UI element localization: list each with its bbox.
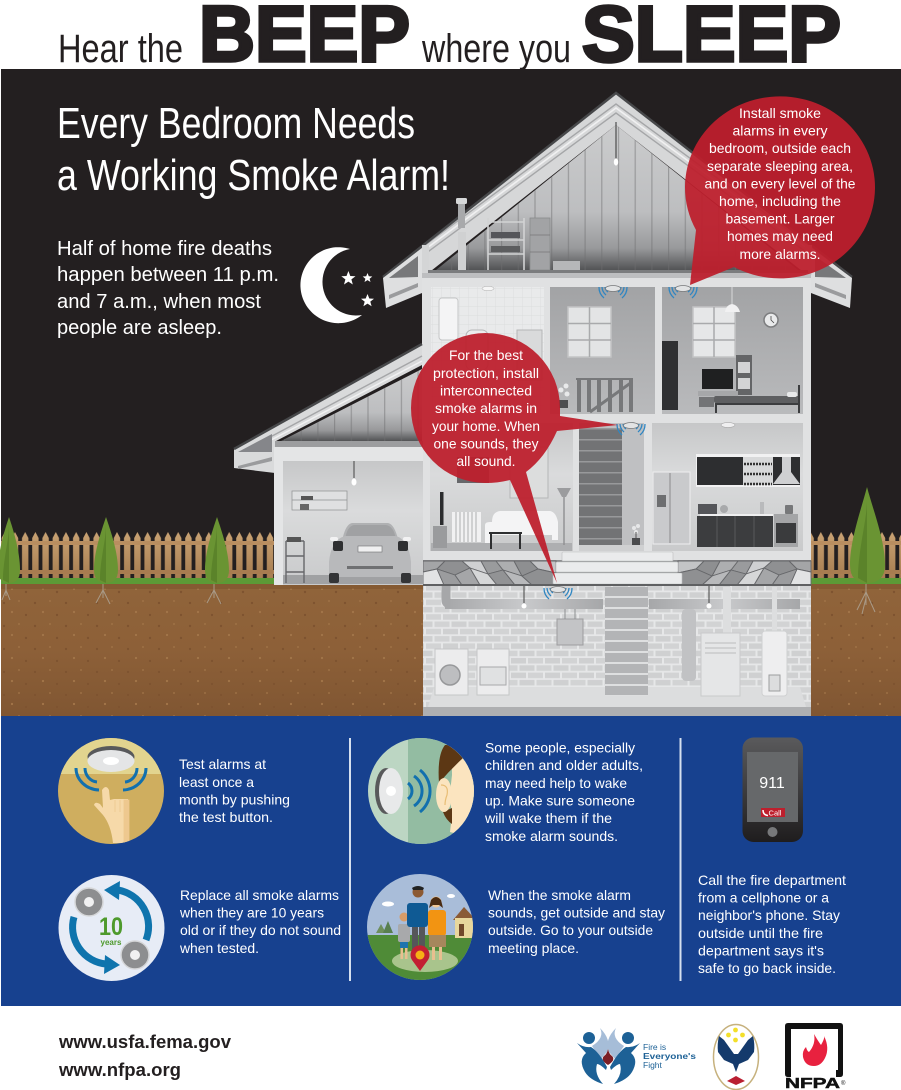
water heater bbox=[772, 587, 777, 631]
tip text: call fire department bbox=[698, 872, 846, 976]
10 years label: 10 bbox=[99, 913, 123, 941]
basement bbox=[423, 586, 811, 716]
fence: left bbox=[1, 532, 275, 582]
blue tips panel bbox=[1, 716, 901, 1006]
callout: interconnected alarms: For the best bbox=[449, 347, 523, 363]
father bbox=[412, 890, 424, 898]
headline: where you bbox=[421, 27, 571, 71]
callout: interconnected alarms bbox=[411, 333, 618, 583]
stove bbox=[774, 514, 798, 547]
callout: install alarms: and on every level of the bbox=[704, 176, 856, 192]
attic bulb bbox=[615, 122, 617, 160]
alarms bbox=[75, 888, 103, 916]
tip text: get outside: outside. Go to your outside bbox=[488, 922, 653, 938]
sound waves bbox=[408, 770, 430, 812]
logo: NFPA: ® bbox=[841, 1080, 846, 1087]
logo: Fire is Everyone's Fight: Fire is bbox=[643, 1042, 666, 1052]
callout: interconnected alarms: smoke alarms in bbox=[435, 400, 537, 416]
headline bbox=[58, 0, 841, 78]
intro statement: and 7 a.m., when most bbox=[57, 291, 261, 313]
logo: Fire is Everyone's Fight: Fight bbox=[643, 1060, 663, 1070]
washer bbox=[435, 649, 468, 695]
tip text: help others wake: may need help to wake bbox=[485, 775, 627, 791]
garage walls and interior bbox=[274, 447, 423, 585]
callout: install alarms: separate sleeping area, bbox=[707, 158, 853, 174]
hanging bulbs bbox=[524, 586, 709, 603]
front steps bbox=[553, 552, 682, 584]
icon: cellphone dialing 911 bbox=[742, 738, 803, 842]
room: living room bbox=[430, 423, 573, 551]
alarm bbox=[88, 746, 134, 759]
logo: Fire is Everyone's Fight bbox=[577, 1028, 696, 1084]
attic boxes bbox=[530, 218, 550, 270]
tip text: help others wake: up. Make sure someone bbox=[485, 792, 635, 808]
upper cabinets bbox=[696, 454, 800, 487]
callout: install alarms: Install smoke bbox=[739, 105, 821, 121]
night sky panel bbox=[1, 69, 901, 585]
footer web addresses: www.usfa.fema.gov bbox=[58, 1032, 231, 1052]
intro statement: people are asleep. bbox=[57, 317, 222, 339]
clouds bbox=[382, 902, 394, 906]
room: bedroom bbox=[662, 286, 803, 414]
tip text: call fire department: department says it's bbox=[698, 942, 824, 958]
tip text: test alarms: Test alarms at bbox=[179, 756, 266, 772]
room: upstairs hall bbox=[550, 286, 655, 414]
main title: a Working Smoke Alarm! bbox=[57, 151, 450, 200]
house walls bbox=[422, 278, 811, 560]
tip text: replace alarms: Replace all smoke alarms bbox=[180, 887, 339, 903]
lower cabinets bbox=[697, 516, 773, 547]
tip text: get outside bbox=[488, 887, 665, 956]
logo: Fire is Everyone's Fight: Everyone's bbox=[643, 1051, 696, 1061]
trees bbox=[0, 487, 885, 583]
footer web addresses bbox=[58, 1032, 231, 1080]
callout: interconnected alarms: interconnected bbox=[440, 382, 532, 398]
furnace bbox=[723, 587, 731, 633]
left eave bbox=[383, 248, 422, 308]
callout: interconnected alarms: your home. When bbox=[432, 418, 540, 434]
tip text: call fire department: from a cellphone or a bbox=[698, 890, 829, 906]
callout: interconnected alarms: protection, install bbox=[433, 365, 539, 381]
tip text: get outside: sounds, get outside and stay bbox=[488, 904, 665, 920]
tip text: test alarms bbox=[179, 756, 290, 825]
fence: right bbox=[811, 532, 901, 582]
room: bathroom bbox=[431, 286, 544, 414]
icon: family at meeting place bbox=[367, 874, 476, 980]
callout: install alarms: bedroom, outside each bbox=[709, 140, 851, 156]
callout: install alarms: home, including the bbox=[719, 193, 841, 209]
tree roots bbox=[2, 584, 875, 614]
dryer bbox=[477, 649, 509, 695]
tip text: help others wake: will wake them if the bbox=[484, 810, 612, 826]
icon: cellphone dialing 911: Call bbox=[769, 808, 782, 818]
logo: NFPA bbox=[785, 1023, 846, 1090]
icon: replace every 10 years: years bbox=[101, 938, 122, 947]
hand bbox=[94, 787, 129, 843]
blue cycle arrows bbox=[118, 890, 149, 940]
column divider bbox=[349, 738, 351, 981]
attic floor bbox=[422, 270, 811, 279]
callout: install alarms bbox=[685, 96, 875, 285]
tip text: replace alarms: old or if they do not sound bbox=[180, 922, 341, 938]
stone foundation bbox=[423, 560, 811, 585]
garage gable bbox=[281, 369, 422, 441]
icon: alarm beside ear bbox=[368, 738, 480, 844]
tip text: replace alarms: when tested. bbox=[179, 940, 259, 956]
tip text: get outside: meeting place. bbox=[488, 940, 579, 956]
soil ground bbox=[1, 584, 901, 716]
intro statement: happen between 11 p.m. bbox=[57, 264, 279, 286]
callout: install alarms: alarms in every bbox=[732, 122, 828, 138]
icon: pressing test button bbox=[58, 738, 164, 844]
tip text: help others wake bbox=[484, 740, 643, 844]
attic shelves bbox=[488, 218, 524, 272]
callout: install alarms: homes may need bbox=[727, 228, 833, 244]
icon: replace every 10 years bbox=[58, 875, 164, 981]
counter appliances bbox=[698, 504, 717, 514]
main title: Every Bedroom Needs bbox=[57, 99, 415, 148]
fridge bbox=[653, 472, 690, 544]
callout: install alarms: more alarms. bbox=[740, 246, 820, 262]
garage roof bbox=[234, 344, 422, 473]
house bbox=[453, 907, 472, 920]
sound waves bbox=[76, 768, 146, 790]
garage bbox=[234, 344, 423, 585]
electrical panel bbox=[557, 619, 583, 645]
tip text: replace alarms: when they are 10 years bbox=[179, 904, 324, 920]
map pin bbox=[410, 945, 430, 971]
tip text: call fire department: Call the fire department bbox=[698, 872, 846, 888]
headline: Hear the bbox=[58, 27, 183, 71]
basement stairs bbox=[605, 587, 648, 696]
callout: install alarms: basement. Larger bbox=[726, 210, 835, 226]
icon: cellphone dialing 911: 911 bbox=[759, 775, 785, 792]
tip text: call fire department: outside until the fire bbox=[698, 925, 823, 941]
floor lamp bbox=[563, 497, 565, 545]
garage bulb bbox=[353, 461, 355, 478]
intro statement: Half of home fire deaths bbox=[57, 238, 272, 260]
range hood bbox=[773, 457, 800, 484]
column divider bbox=[680, 738, 682, 981]
radiator bbox=[452, 512, 481, 542]
tip text: help others wake: Some people, especially bbox=[485, 740, 635, 756]
garage shelves bbox=[292, 491, 347, 510]
callout: interconnected alarms: all sound. bbox=[456, 453, 516, 469]
mother bbox=[430, 896, 442, 908]
child bbox=[400, 912, 407, 922]
vent pipe bbox=[456, 198, 467, 204]
room: stairwell bbox=[579, 422, 645, 551]
tip text: help others wake: smoke alarm sounds. bbox=[485, 828, 618, 844]
ducts bbox=[445, 599, 603, 609]
TV and stand bbox=[702, 369, 733, 389]
tip text: replace alarms bbox=[179, 887, 341, 956]
intro statement bbox=[57, 238, 279, 339]
car bbox=[340, 523, 401, 560]
bed bbox=[714, 396, 800, 403]
callout: interconnected alarms: one sounds, they bbox=[434, 436, 538, 452]
right eave bbox=[811, 248, 852, 308]
pine trees bbox=[376, 924, 384, 933]
tip text: help others wake: children and older adults, bbox=[485, 757, 643, 773]
tip text: get outside: When the smoke alarm bbox=[488, 887, 631, 903]
tool cart bbox=[286, 541, 304, 583]
pendant lamp bbox=[731, 287, 733, 305]
tip text: test alarms: the test button. bbox=[179, 809, 273, 825]
coffee table bbox=[489, 533, 522, 549]
room: kitchen bbox=[652, 422, 803, 551]
logo: eagle seal bbox=[714, 1024, 758, 1090]
head with hair and ear bbox=[450, 746, 474, 833]
bookcase bbox=[736, 355, 752, 395]
footer web addresses: www.nfpa.org bbox=[58, 1060, 181, 1080]
tip text: test alarms: month by pushing bbox=[179, 792, 290, 808]
icon: crescent moon and stars bbox=[300, 247, 374, 323]
attic gable wall bbox=[422, 120, 812, 275]
main house roof bbox=[383, 93, 852, 308]
dark door bbox=[662, 341, 678, 410]
sofa bbox=[485, 511, 558, 543]
side alarm bbox=[375, 768, 388, 814]
tip text: test alarms: least once a bbox=[179, 774, 254, 790]
tip text: call fire department: safe to go back inside. bbox=[698, 960, 836, 976]
wall clock bbox=[764, 313, 778, 327]
main title bbox=[57, 99, 450, 200]
grass strip bbox=[1, 578, 901, 585]
tip text: call fire department: neighbor's phone. Stay bbox=[698, 907, 840, 923]
TV on stand bbox=[440, 492, 444, 525]
